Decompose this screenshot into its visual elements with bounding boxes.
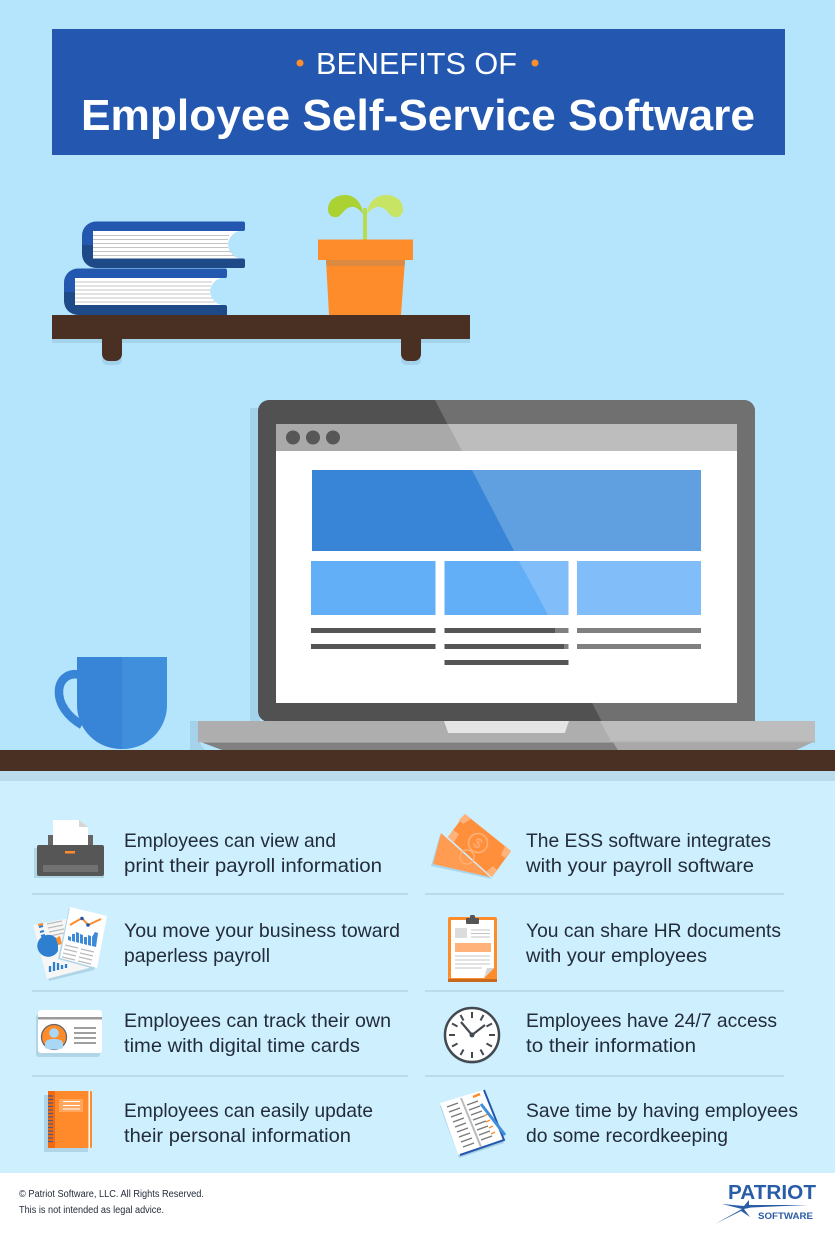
panel: benefits list xyxy=(0,771,835,1173)
icon: coffee mug xyxy=(59,657,167,749)
laptop shadow xyxy=(190,408,260,750)
laptop lid xyxy=(258,400,755,722)
benefit text: integrates with payroll: with your payroll software xyxy=(525,855,754,877)
benefit text: recordkeeping xyxy=(526,1100,798,1147)
benefit text: HR documents: with your employees xyxy=(525,945,707,967)
laptop screen xyxy=(276,424,737,703)
benefit text: personal information: their personal information xyxy=(124,1125,351,1147)
benefit text: recordkeeping: Save time by having employees xyxy=(526,1100,798,1122)
text lines xyxy=(311,628,701,665)
benefit text: 24/7 access xyxy=(526,1010,777,1057)
benefit text: digital time cards xyxy=(124,1010,391,1057)
benefit text: personal information xyxy=(124,1100,373,1147)
benefit text: HR documents xyxy=(525,920,781,967)
laptop base xyxy=(198,721,815,750)
benefit text: digital time cards: Employees can track their own xyxy=(124,1010,391,1032)
title line one: BENEFITS OF xyxy=(316,47,517,81)
benefit text: digital time cards: time with digital time cards xyxy=(124,1035,360,1057)
benefit text: paperless payroll xyxy=(124,920,400,967)
icon: printer xyxy=(34,820,104,878)
benefit text: paperless payroll: You move your business toward xyxy=(124,920,400,942)
Patriot Software logo: SOFTWARE xyxy=(758,1211,813,1222)
benefit text: personal information: Employees can easily update xyxy=(124,1100,373,1122)
icon: wall clock xyxy=(444,1008,500,1064)
copyright text: © Patriot Software, LLC. All Rights Reserved. xyxy=(19,1189,204,1200)
benefit text: payroll information: Employees can view and xyxy=(124,830,336,852)
content cards xyxy=(311,561,701,615)
icon: orange notebook xyxy=(44,1091,92,1152)
icon: stacked books xyxy=(64,222,245,315)
Patriot Software logo: PATRIOT xyxy=(728,1182,816,1204)
icon: laptop xyxy=(190,400,815,750)
icon: potted plant xyxy=(318,195,413,315)
benefit text: payroll information: print their payroll information xyxy=(124,855,382,877)
desk xyxy=(0,750,835,771)
benefit text: integrates with payroll: The ESS software integrates xyxy=(526,830,771,852)
benefit text: paperless payroll: paperless payroll xyxy=(124,945,270,967)
icon: money bills xyxy=(431,814,511,879)
Patriot Software logo xyxy=(715,1182,816,1224)
icon: ID card xyxy=(36,1010,102,1057)
icon: paper reports xyxy=(33,907,107,981)
benefit text: HR documents: You can share HR documents xyxy=(526,920,781,942)
icon: clipboard xyxy=(448,915,497,982)
benefit text: recordkeeping: do some recordkeeping xyxy=(526,1125,728,1147)
benefit text: integrates with payroll xyxy=(525,830,771,877)
copyright text: This is not intended as legal advice. xyxy=(19,1205,164,1216)
icon: ledger book and pen xyxy=(440,1090,505,1158)
title banner xyxy=(52,29,785,155)
title line two: Employee Self-Service Software xyxy=(81,91,755,140)
shelf xyxy=(52,315,470,365)
hero banner xyxy=(312,470,701,551)
copyright text xyxy=(19,1189,204,1216)
benefit text: 24/7 access: to their information xyxy=(526,1035,696,1057)
footer xyxy=(0,1173,835,1233)
benefit text: payroll information xyxy=(124,830,382,877)
icon: money bills: $ xyxy=(470,834,486,852)
benefit text: 24/7 access: Employees have 24/7 access xyxy=(526,1010,777,1032)
